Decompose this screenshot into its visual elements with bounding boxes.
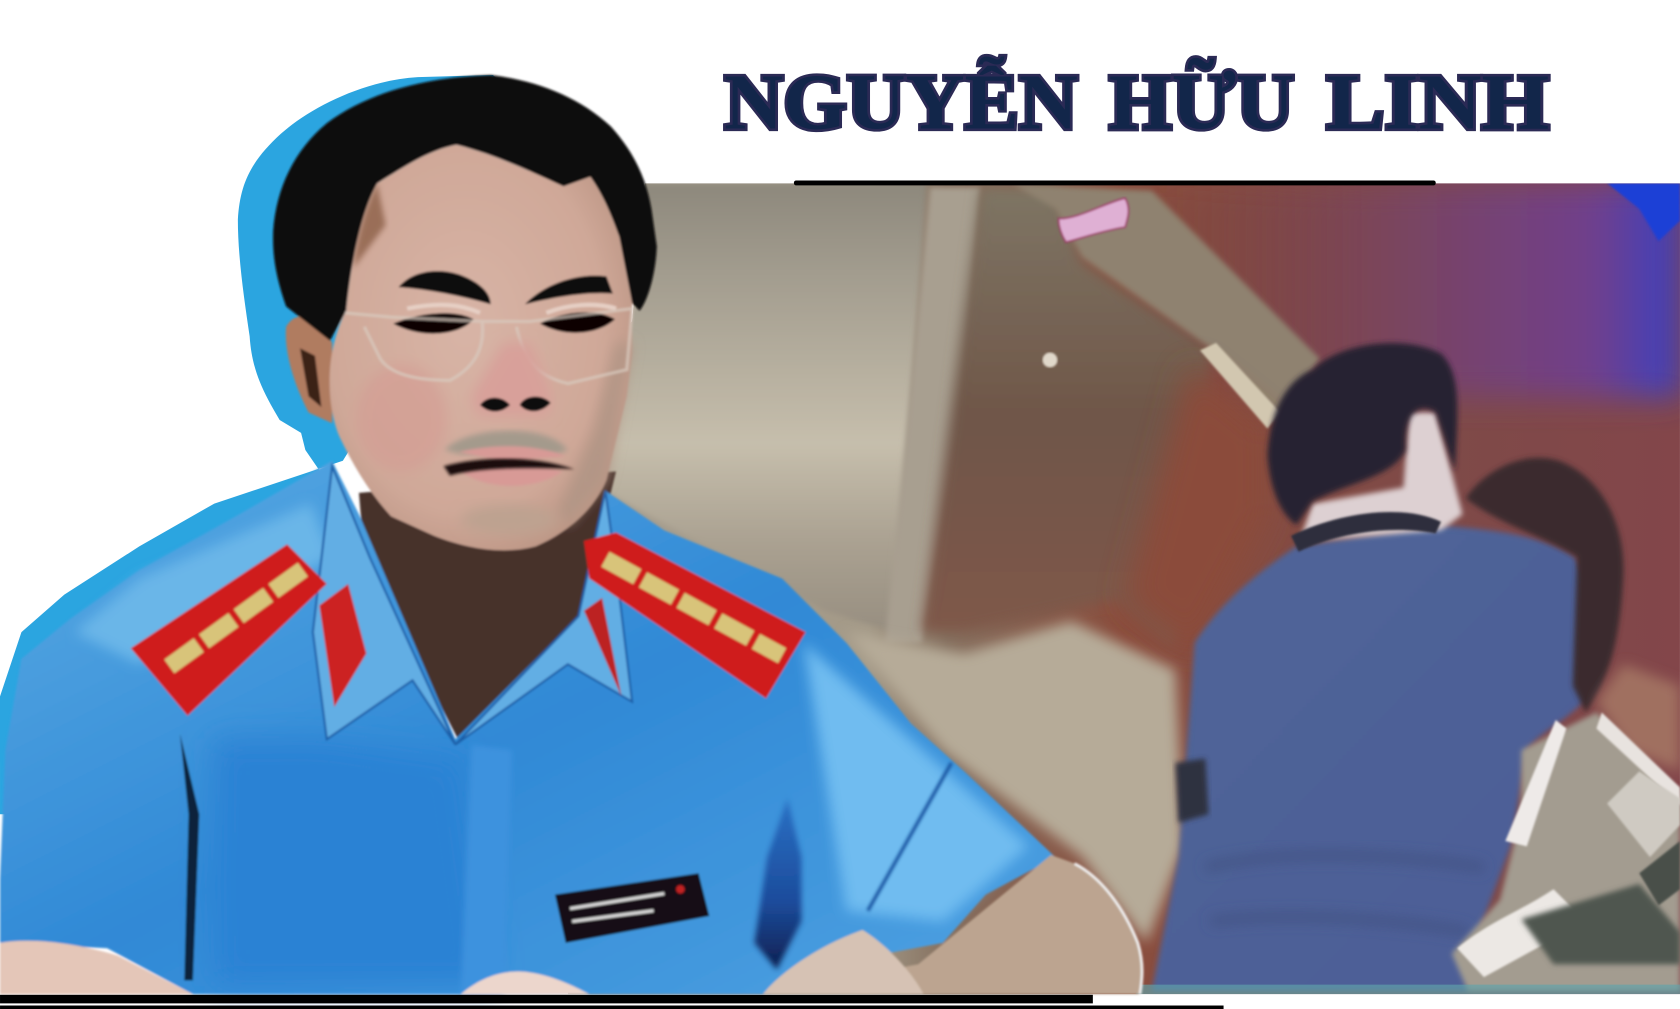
chin — [461, 505, 557, 535]
right hand — [763, 930, 924, 994]
left eye — [393, 313, 474, 334]
nose — [471, 343, 552, 416]
elevator sign — [1059, 198, 1128, 242]
title word 3: LINH — [1326, 59, 1549, 147]
forearm white edge — [1075, 864, 1142, 994]
right collar tab — [584, 598, 621, 696]
elevator walls — [568, 183, 1680, 994]
shirt placket — [461, 745, 512, 994]
elevator button — [1042, 352, 1057, 367]
sleeve seam left — [180, 734, 199, 980]
face — [330, 145, 632, 550]
photo bottom edge — [1136, 985, 1680, 994]
eye creases — [407, 305, 616, 313]
dark fold right — [754, 798, 801, 970]
door strip — [1200, 343, 1280, 429]
left epaulette — [131, 544, 327, 716]
centre hand — [461, 971, 589, 994]
cheek blush left — [357, 364, 447, 471]
moustache — [445, 431, 568, 454]
right forearm — [857, 855, 1142, 994]
shoulder shading — [75, 504, 332, 664]
jaw shadow — [557, 343, 632, 525]
title word 1: NGUYỄN — [724, 58, 1078, 147]
left collar tab — [319, 584, 366, 707]
right collar — [455, 491, 632, 745]
hair — [273, 75, 657, 341]
bottom rule upper — [0, 995, 1093, 1003]
title — [724, 58, 1549, 147]
head — [273, 75, 657, 550]
eyebrows — [399, 271, 613, 304]
mouth — [444, 458, 574, 476]
title underline — [794, 181, 1436, 185]
left forearm — [0, 941, 193, 994]
blue halo cutout — [0, 75, 557, 814]
name tag — [555, 873, 709, 943]
bottom rule lower — [0, 1006, 1224, 1009]
neck — [359, 471, 616, 745]
chair and child's legs — [1452, 712, 1680, 991]
background photo: elevator scene — [568, 183, 1680, 994]
temple shadow — [354, 183, 386, 268]
left collar — [313, 466, 455, 745]
ear inner — [300, 348, 321, 407]
man in jacket — [1152, 343, 1598, 991]
title word 2: HỮU — [1109, 59, 1294, 147]
child — [1466, 458, 1680, 771]
right epaulette — [584, 532, 806, 699]
portrait: uniformed officer — [0, 75, 1142, 994]
lips — [459, 446, 566, 486]
right eye — [540, 312, 615, 333]
ear — [286, 316, 332, 423]
sleeve seam right — [868, 763, 951, 911]
nostrils — [480, 397, 551, 411]
elevator floor — [846, 621, 1184, 943]
uniform shirt — [0, 461, 1055, 994]
glasses — [345, 309, 632, 384]
